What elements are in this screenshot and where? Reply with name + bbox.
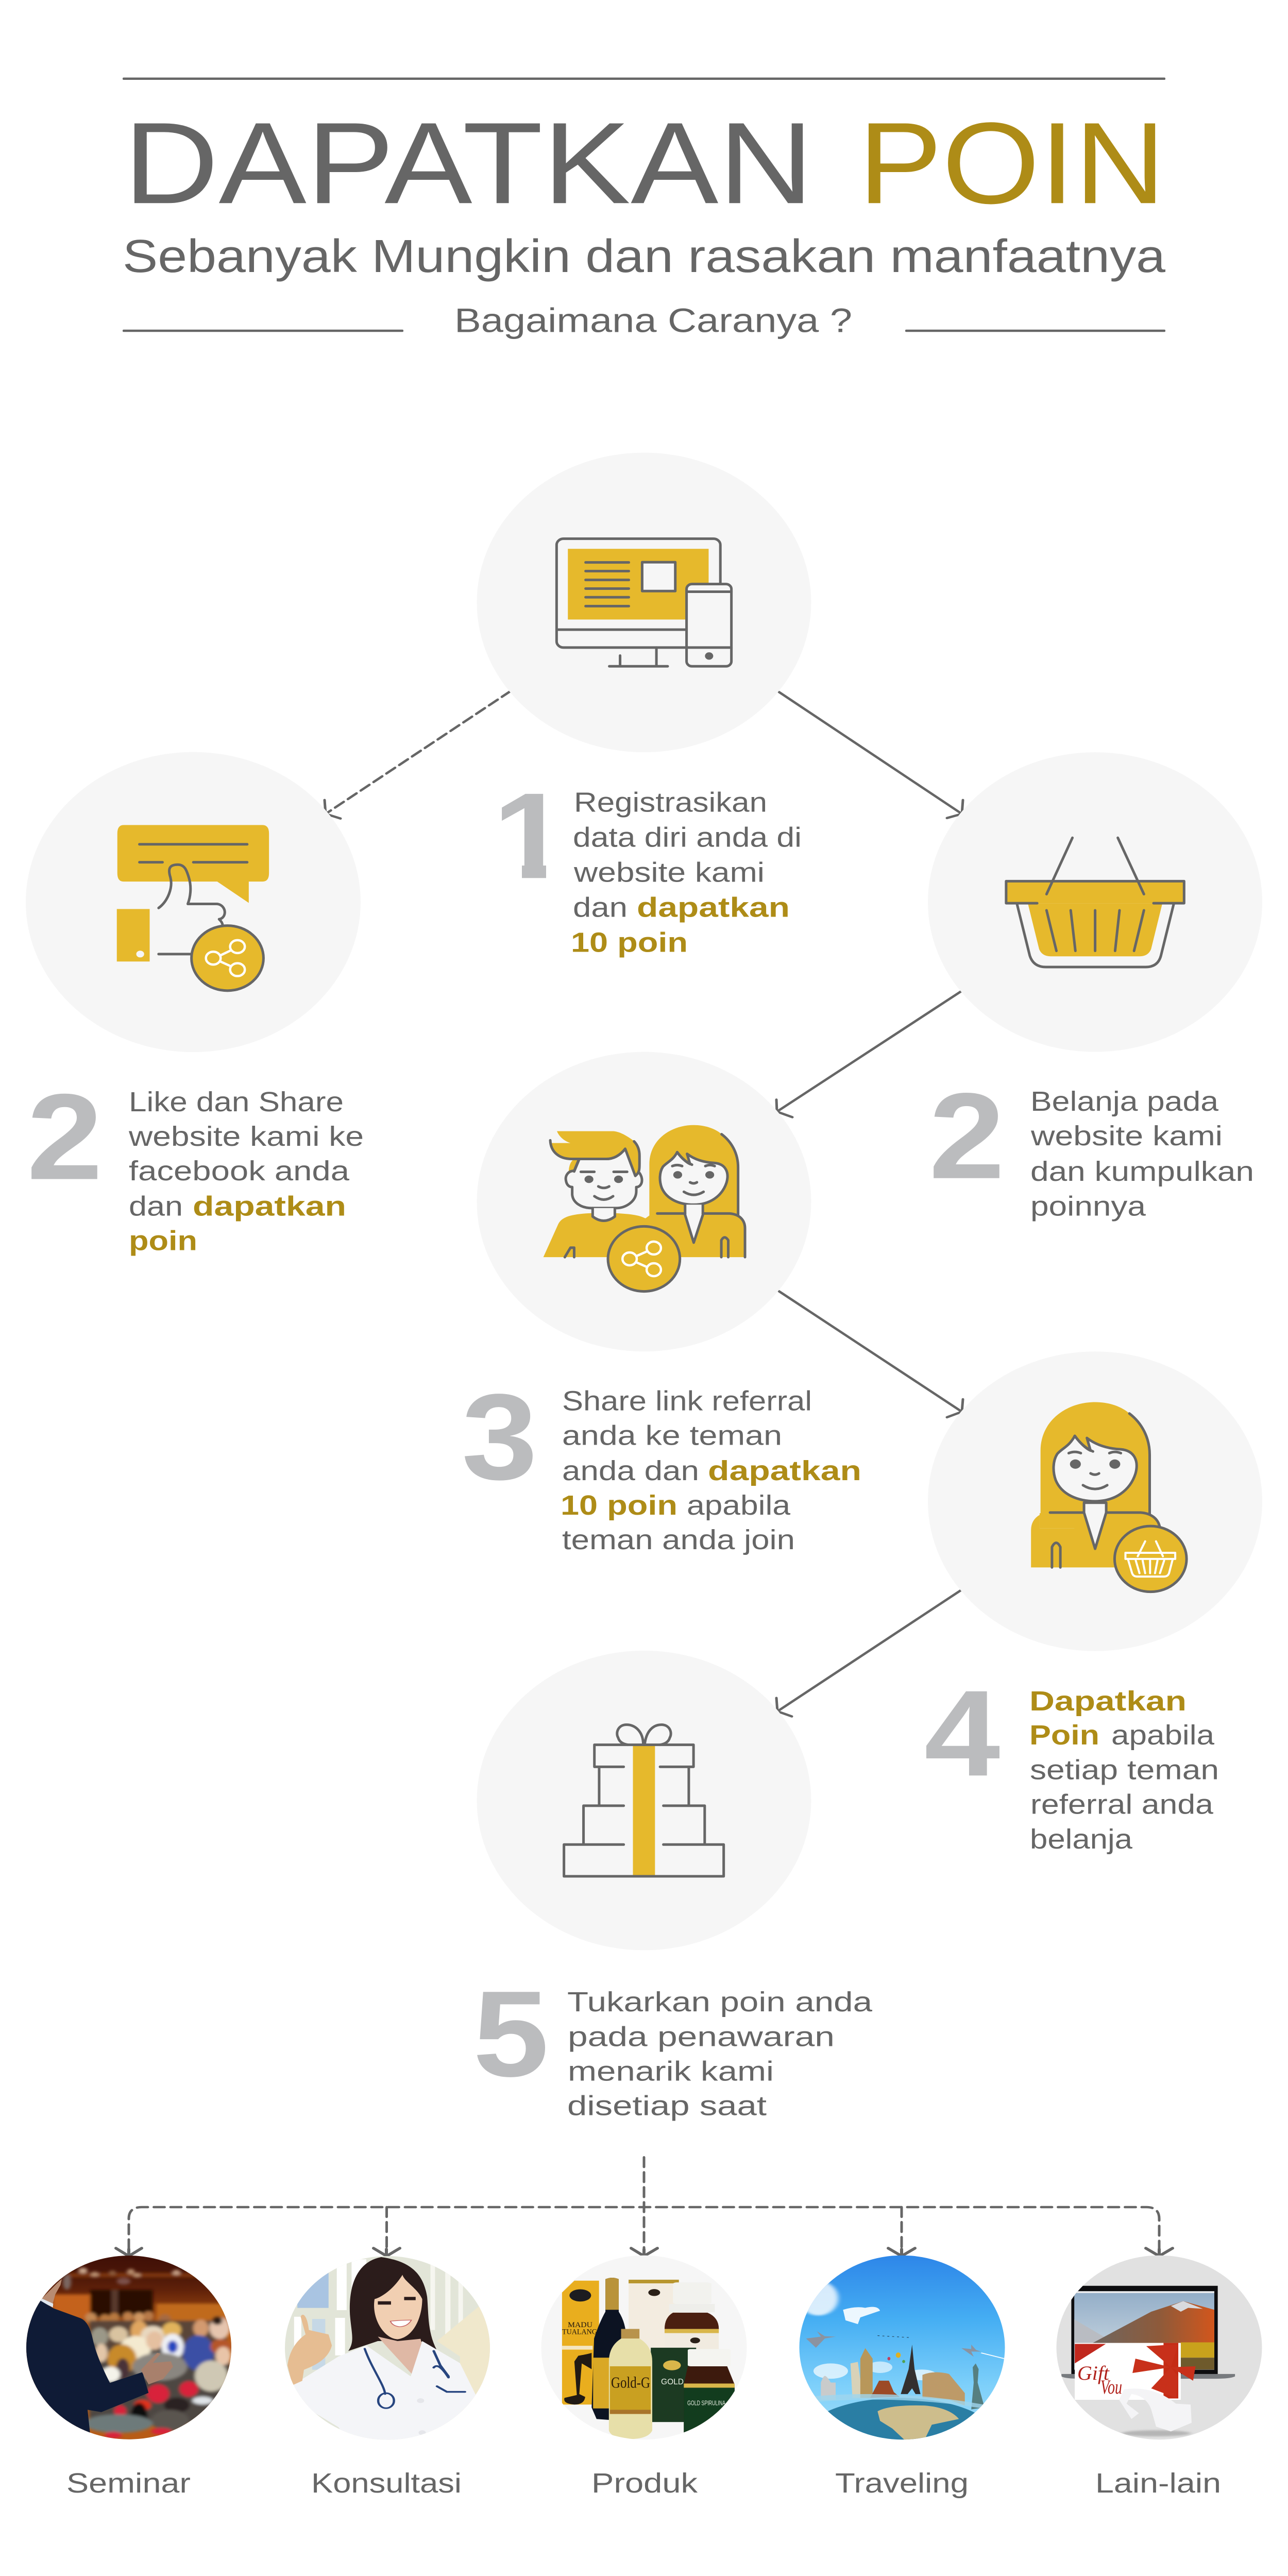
icon: shopping basket — [1006, 838, 1184, 967]
icon: thumbs up with speech bubble — [117, 825, 269, 991]
panel: step 2 like and share — [26, 752, 361, 1052]
top rule — [123, 78, 1165, 80]
step 2 left text — [128, 1087, 364, 1257]
step 1 text: data diri anda di — [573, 822, 802, 853]
connector: dashed branches to rewards — [116, 2157, 1173, 2256]
photo: gift voucher, laptop and headphones — [1053, 2252, 1269, 2444]
woman figure — [626, 1125, 745, 1257]
step 3 text: 10 poin — [561, 1490, 677, 1521]
step 4 text: Poin — [1029, 1720, 1099, 1751]
step 1 text: dan — [573, 892, 628, 923]
panel: step 4 referral purchase — [928, 1351, 1262, 1651]
step 4 text: belanja — [1030, 1824, 1132, 1855]
step 2 left text: facebook anda — [129, 1156, 349, 1187]
step 5 text: Tukarkan poin anda — [567, 1987, 872, 2018]
reward labels: Seminar — [66, 2468, 191, 2499]
reward labels: Traveling — [835, 2468, 969, 2499]
share badge — [608, 1226, 680, 1292]
circle background — [477, 1651, 811, 1950]
step 1 number: 1 — [493, 768, 568, 904]
step 1 text — [571, 787, 802, 958]
reward labels: Lain-lain — [1095, 2468, 1221, 2499]
reward labels: Konsultasi — [311, 2468, 462, 2499]
title: DAPATKAN POIN: POIN — [858, 98, 1165, 228]
panel: step 1 register — [477, 453, 811, 752]
voucher script text — [1077, 2362, 1122, 2398]
circle background — [541, 2256, 747, 2439]
circle background — [477, 453, 811, 752]
photo: doctor consultation — [282, 2255, 496, 2443]
title: DAPATKAN POIN: DAPATKAN — [124, 98, 814, 228]
reward labels: Produk — [591, 2468, 698, 2499]
step 2 left text: poin — [129, 1225, 197, 1257]
panel: step 3 share referral — [477, 1052, 811, 1351]
step 3 text — [561, 1385, 861, 1555]
header: title block — [123, 78, 1165, 339]
step 4 number: 4 — [924, 1665, 1000, 1802]
step 4 text: referral anda — [1030, 1789, 1213, 1820]
product label text: Gold-G — [611, 2374, 650, 2391]
icon: woman with basket badge — [1031, 1402, 1187, 1592]
panel: step 2 shop — [928, 752, 1262, 1052]
circle background — [26, 752, 361, 1052]
step 2 right text: Belanja pada — [1030, 1086, 1218, 1117]
arrow: step 3 to step 4 — [779, 1291, 963, 1417]
subtitle: Sebanyak Mungkin dan rasakan manfaatnya — [123, 231, 1165, 282]
icon: stacked gift boxes — [564, 1725, 724, 1876]
arrow: step 2 right to step 3 — [776, 991, 961, 1117]
step 5 text: pada penawaran — [568, 2021, 835, 2053]
step 2 right number: 2 — [929, 1068, 1005, 1205]
step 2 left text: website kami ke — [128, 1121, 364, 1152]
step 2 right text — [1030, 1086, 1254, 1222]
step 1 text: dapatkan — [637, 892, 790, 923]
photo: travel landmarks — [800, 2256, 1005, 2440]
panel: step 5 redeem — [477, 1651, 811, 1950]
icon: man and woman with share badge — [544, 1125, 745, 1292]
product label text — [562, 2321, 725, 2406]
step 5 text: disetiap saat — [567, 2091, 767, 2122]
photo: seminar audience — [26, 2256, 231, 2439]
title: DAPATKAN POIN — [124, 98, 1165, 228]
circle background — [928, 1351, 1262, 1651]
step 3 text: apabila — [687, 1490, 790, 1521]
product label text: GOLD — [661, 2377, 684, 2386]
arrow: step 1 to step 2 right — [779, 692, 963, 818]
left and right rules — [123, 330, 1165, 332]
step 1 text: website kami — [573, 857, 765, 888]
step 2 left number: 2 — [27, 1069, 103, 1205]
step 3 text: teman anda join — [562, 1524, 795, 1555]
question heading: Bagaimana Caranya ? — [454, 301, 852, 339]
step 4 text — [1029, 1686, 1219, 1855]
product label text: MADU — [568, 2321, 592, 2329]
step 4 text: setiap teman — [1030, 1754, 1219, 1786]
step 1 text: 10 poin — [571, 927, 688, 958]
icon: monitor and phone — [556, 539, 732, 666]
step 5 number: 5 — [473, 1965, 549, 2103]
step 4 text: apabila — [1111, 1720, 1214, 1751]
step 2 right text: website kami — [1030, 1121, 1223, 1151]
step 2 right text: poinnya — [1030, 1191, 1146, 1222]
arrow: step 1 to step 2 left (dashed) — [325, 691, 511, 819]
step 3 text: anda ke teman — [562, 1420, 782, 1451]
step 1 text: Registrasikan — [574, 787, 767, 818]
arrow: step 4 to step 5 — [776, 1590, 961, 1717]
step 2 left text: dapatkan — [193, 1191, 346, 1222]
voucher script text: Gift — [1077, 2362, 1110, 2385]
voucher script text: Vou — [1100, 2376, 1122, 2398]
photo: health products — [541, 2256, 747, 2439]
step 3 text: dapatkan — [708, 1455, 861, 1486]
step 3 text: anda dan — [562, 1455, 699, 1486]
circle background — [928, 752, 1262, 1052]
man figure — [544, 1131, 648, 1257]
product label text: TUALANG — [562, 2328, 597, 2336]
step 2 right text: dan kumpulkan — [1030, 1156, 1254, 1187]
step 3 number: 3 — [462, 1369, 537, 1505]
step 5 text — [567, 1987, 872, 2122]
step 4 text: Dapatkan — [1029, 1686, 1187, 1717]
step 3 text: Share link referral — [562, 1385, 812, 1417]
step 2 left text: Like dan Share — [129, 1087, 344, 1117]
reward labels — [66, 2468, 1221, 2499]
product label text: GOLD SPIRULINA — [687, 2399, 725, 2406]
circle background — [477, 1052, 811, 1351]
step 2 left text: dan — [129, 1191, 183, 1222]
step 5 text: menarik kami — [568, 2056, 774, 2087]
